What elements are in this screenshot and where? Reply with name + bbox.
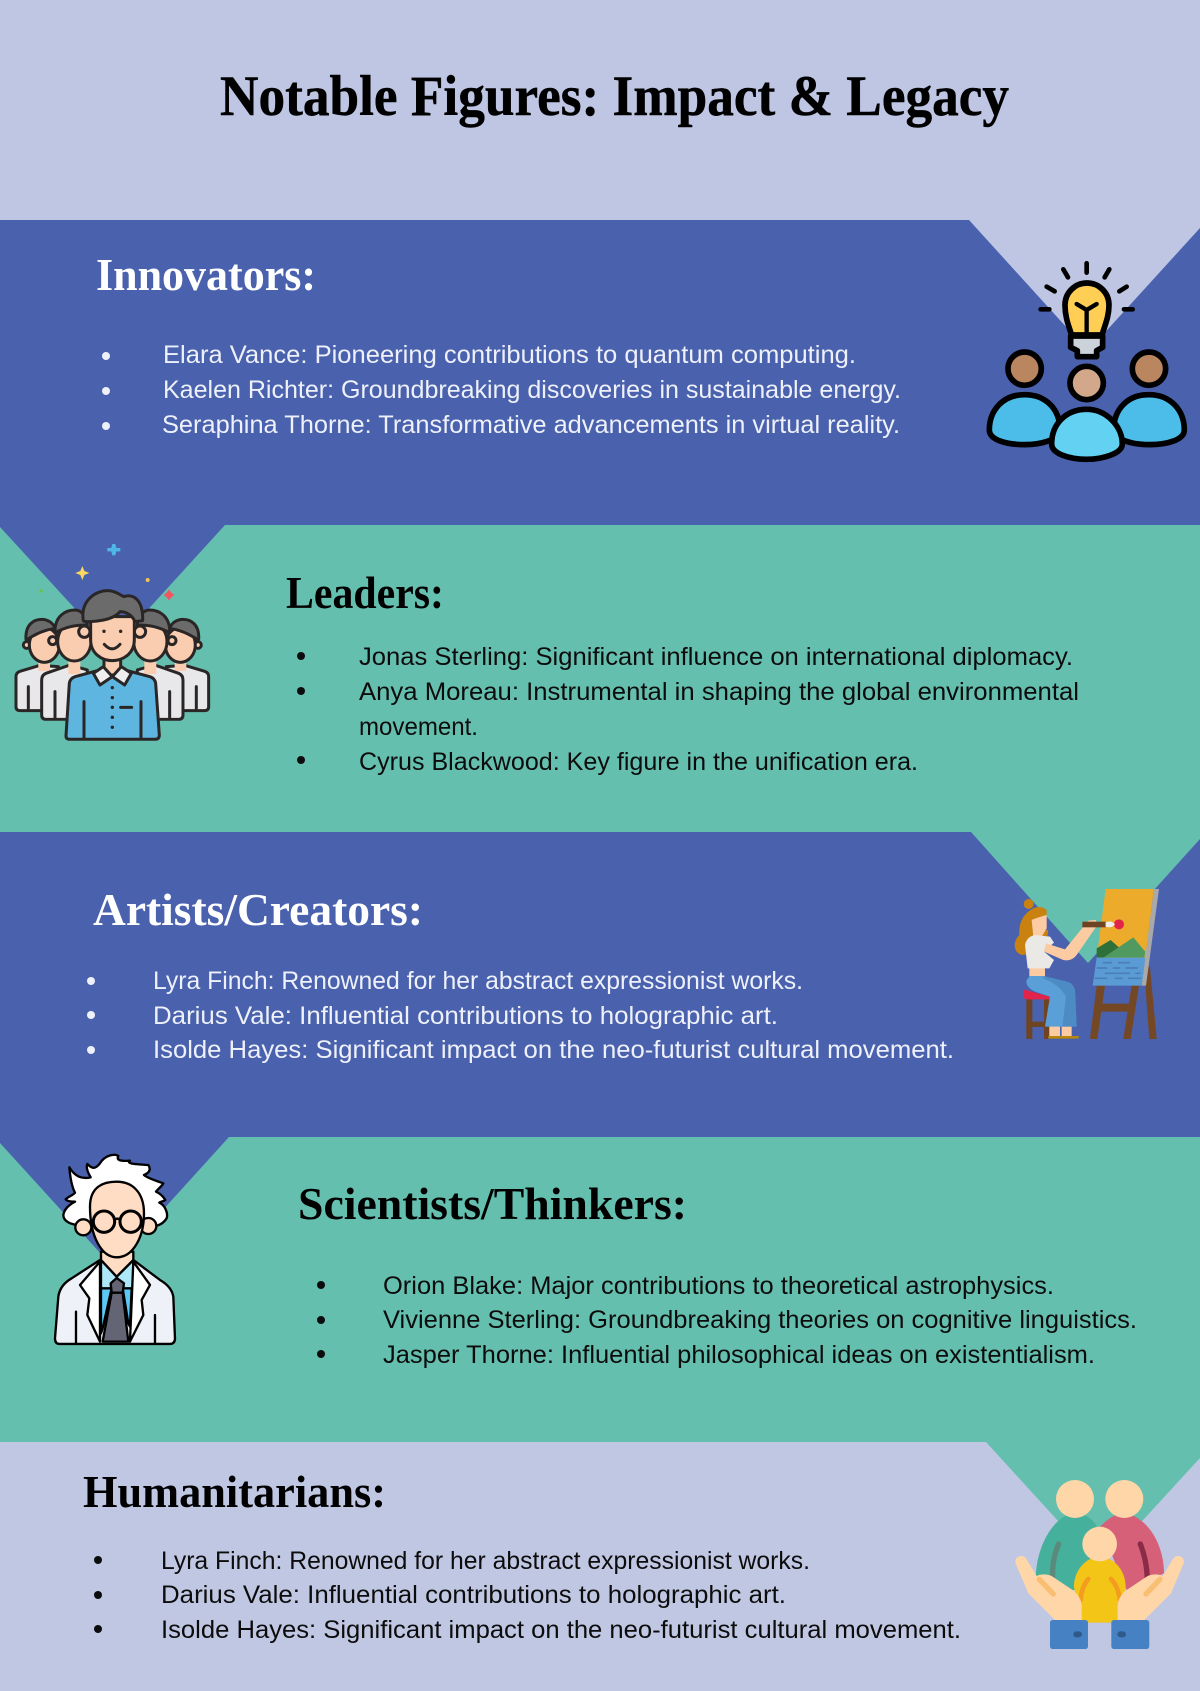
list: scientists and thinkers: Orion Blake: Major contributions to theoretical astrophysics.: [383, 1272, 1054, 1300]
panel: artists and creators: [0, 832, 1200, 1137]
panel: innovators: [0, 220, 1200, 525]
list: leaders: Anya Moreau: Instrumental in shaping the global environmental: [359, 678, 1079, 706]
icon: group of leaders: [16, 544, 209, 739]
list: humanitarians: Isolde Hayes: Significant impact on the neo-futurist cultural movement.: [161, 1616, 961, 1644]
list: leaders: Cyrus Blackwood: Key figure in the unification era.: [359, 748, 918, 776]
list: artists and creators: Lyra Finch: Renowned for her abstract expressionist works.: [153, 967, 803, 995]
panel: scientists and thinkers: [0, 1137, 1200, 1442]
panel: leaders: [0, 525, 1200, 832]
list: humanitarians: Lyra Finch: Renowned for her abstract expressionist works.: [161, 1547, 810, 1575]
list: humanitarians: [94, 1547, 961, 1644]
panel: humanitarians: [0, 1442, 1200, 1691]
list: scientists and thinkers: [317, 1272, 1137, 1369]
heading: artists and creators: Artists/Creators:: [93, 884, 423, 935]
list: innovators: Kaelen Richter: Groundbreaking discoveries in sustainable energy.: [163, 376, 901, 404]
list: humanitarians: Darius Vale: Influential contributions to holographic art.: [161, 1581, 786, 1609]
list: artists and creators: [87, 967, 954, 1064]
list: innovators: Elara Vance: Pioneering contributions to quantum computing.: [163, 341, 856, 369]
icon: artist painting at easel: [1015, 889, 1159, 1039]
icon: family held in caring hands: [1015, 1480, 1184, 1649]
list: artists and creators: Darius Vale: Influential contributions to holographic art.: [153, 1002, 778, 1030]
heading: scientists and thinkers: Scientists/Thinkers:: [298, 1178, 687, 1229]
list: scientists and thinkers: Vivienne Sterling: Groundbreaking theories on cognitive linguistics.: [383, 1306, 1137, 1334]
icon: scientist in lab coat: [55, 1155, 175, 1344]
list: artists and creators: Isolde Hayes: Significant impact on the neo-futurist cultural movement.: [153, 1036, 954, 1064]
list: innovators: Seraphina Thorne: Transformative advancements in virtual reality.: [162, 411, 900, 439]
heading: humanitarians: Humanitarians:: [83, 1466, 386, 1517]
list: scientists and thinkers: Jasper Thorne: Influential philosophical ideas on existentialism.: [383, 1341, 1095, 1369]
heading: leaders: Leaders:: [286, 567, 444, 618]
heading: innovators: Innovators:: [96, 249, 316, 300]
list: leaders: Jonas Sterling: Significant influence on international diplomacy.: [359, 643, 1073, 671]
title: Notable Figures: Impact & Legacy: [220, 65, 1009, 128]
list: leaders: [297, 643, 1079, 776]
icon: lightbulb over three people: [989, 263, 1184, 459]
list: innovators: [102, 341, 901, 439]
list: leaders: movement.: [359, 713, 478, 741]
